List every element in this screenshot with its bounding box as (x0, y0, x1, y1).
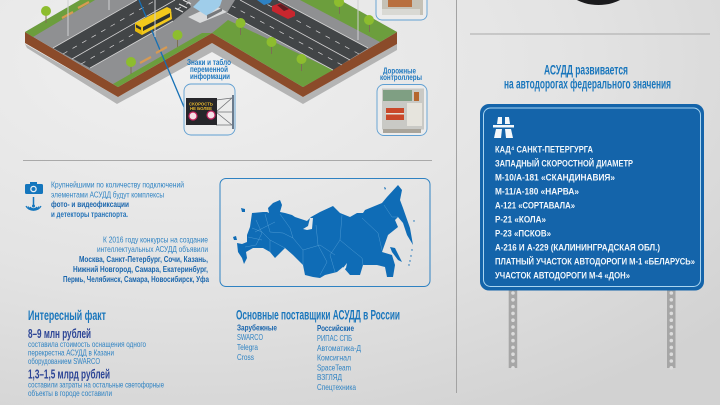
text block: detection complexes: элементами АСУДД будут комплексы (51, 190, 164, 200)
list: Russian suppliers: SpaceTeam (317, 362, 351, 372)
list: federal roads: Р-21 «КОЛА» (495, 214, 546, 226)
sign posts (509, 288, 676, 368)
list: Russian suppliers: Автоматика-Д (317, 343, 361, 353)
benches (62, 2, 167, 63)
text block: 2016 tenders: Пермь, Челябинск, Самара, Новосибирск, Уфа (63, 274, 209, 284)
list: federal roads: А-121 «СОРТАВАЛА» (495, 200, 575, 212)
text block: 2016 tenders: К 2016 году конкурсы на создание (103, 234, 208, 244)
list: federal roads: КАД⁴ САНКТ-ПЕТЕРГУРГА (495, 144, 593, 156)
list: Russian suppliers (317, 323, 361, 392)
list: federal roads: А-216 И А-229 (КАЛИНИНГРАДСКАЯ ОБЛ.) (495, 242, 660, 254)
list: federal roads (495, 144, 695, 282)
panel: federal roads sign (480, 104, 704, 290)
text block: 2016 tenders: Нижний Новгород, Самара, Екатеринбург, (73, 264, 208, 274)
fact: Kazan intersection cost: перекрестна АСУДД в Казани (28, 348, 114, 358)
label: road controllers: контроллеры (380, 72, 422, 82)
trees (41, 0, 374, 74)
text block: detection complexes: фото- и видеофиксации (51, 199, 129, 209)
callout: variable message sign: НЕ БОЛЕЕ (190, 106, 212, 111)
list: foreign suppliers: Cross (237, 352, 254, 362)
fact: traffic light costs: составили затраты на остальные светофорные (28, 380, 164, 390)
illustration: isometric road junction (25, 0, 397, 107)
list: Russian suppliers: Спецтехника (317, 382, 356, 392)
street lamps (68, 0, 358, 40)
icon: blue car (257, 0, 272, 5)
fact: Kazan intersection cost (28, 326, 146, 366)
text block: detection complexes: Крупнейшими по количеству подключений (51, 180, 184, 190)
list: federal roads: Р-23 «ПСКОВ» (495, 228, 551, 240)
icon: yellow bus (135, 7, 172, 35)
text block: detection complexes: и детекторы транспорта. (51, 209, 128, 219)
fact: Kazan intersection cost: 8–9 млн рублей (28, 326, 91, 341)
fact: traffic light costs (28, 366, 164, 398)
text block: 2016 tenders: интеллектуальных АСУДД объявили (97, 244, 208, 254)
list: Russian suppliers: Российские (317, 323, 354, 333)
fact: Kazan intersection cost: оборудованием SWARCO (28, 356, 100, 366)
list: federal roads: М-11/А-180 «НАРВА» (495, 186, 579, 198)
label: signs and variable information boards (187, 57, 231, 81)
label: road controllers (380, 66, 422, 82)
list: federal roads: М-10/А-181 «СКАНДИНАВИЯ» (495, 172, 615, 184)
icon: motorway symbol (493, 117, 514, 138)
icon: transport detector (26, 197, 41, 210)
list: foreign suppliers: Зарубежные (237, 323, 277, 333)
list: foreign suppliers: Telegra (237, 342, 258, 352)
list: foreign suppliers: SWARCO (237, 332, 263, 342)
fact: traffic light costs: 1,3–1,5 млрд рублей (28, 366, 110, 382)
fact: Kazan intersection cost: составила стоимость оснащения одного (28, 339, 146, 349)
text block: 2016 tenders: Москва, Санкт-Петербург, Сочи, Казань, (79, 254, 208, 264)
text block: detection complexes (51, 180, 184, 219)
list: federal roads: УЧАСТОК АВТОДОРОГИ М-4 «ДОН» (495, 270, 630, 282)
panel: map of Russia (220, 178, 430, 286)
heading: main suppliers: Основные поставщики АСУДД в России (236, 308, 400, 322)
callout: top-right device (376, 0, 427, 20)
icon: camera (25, 182, 43, 194)
heading: interesting fact: Интересный факт (28, 308, 106, 323)
fact: traffic light costs: объекты в городе составили (28, 388, 112, 398)
icon: red car (272, 3, 295, 19)
heading: ASUDD on federal roads (504, 62, 671, 92)
icon: black wheel at top (562, 0, 634, 5)
text block: 2016 tenders (63, 234, 209, 284)
label: signs and variable information boards: Знаки и табло (187, 57, 231, 67)
list: foreign suppliers (237, 323, 277, 362)
label: road controllers: Дорожные (383, 66, 416, 76)
list: Russian suppliers: Комсигнал (317, 353, 351, 363)
icon: bus stop (188, 0, 227, 23)
map: Russia regions (233, 185, 415, 278)
list: Russian suppliers: РИПАС СПБ (317, 333, 352, 343)
callout: road controller cabinet (377, 84, 427, 136)
heading: ASUDD on federal roads: АСУДД развивается (544, 62, 628, 78)
label: signs and variable information boards: переменной (190, 64, 228, 74)
list: Russian suppliers: ВЗГЛЯД (317, 372, 342, 382)
callout: variable message sign (184, 84, 235, 135)
callout: variable message sign: СКОРОСТЬ (189, 102, 214, 106)
label: signs and variable information boards: информации (190, 71, 230, 81)
list: federal roads: ЗАПАДНЫЙ СКОРОСТНОЙ ДИАМЕТР (495, 158, 634, 170)
arrow: leader line to sign callout (139, 0, 184, 107)
